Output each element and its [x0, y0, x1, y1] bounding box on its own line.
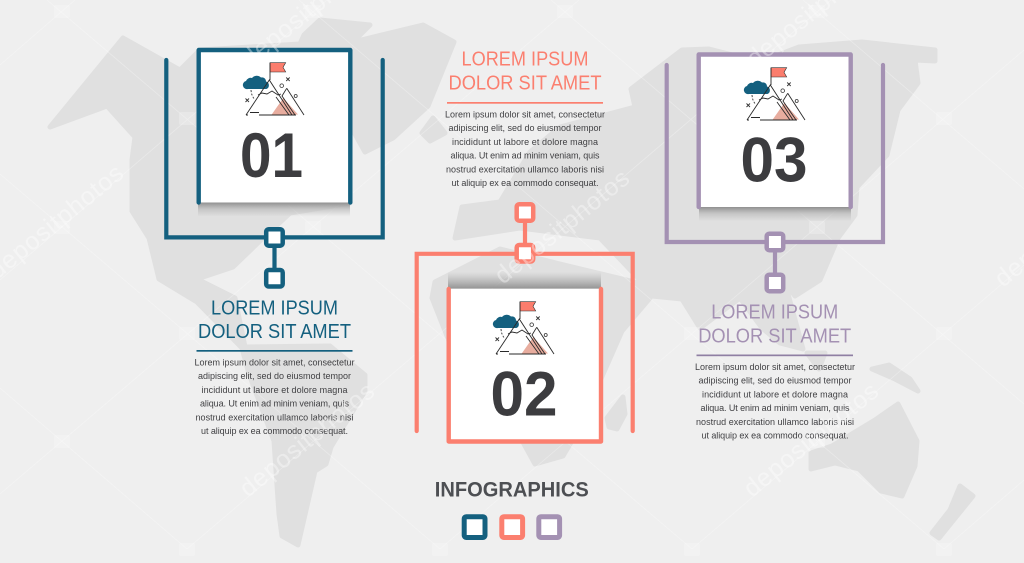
text block 01: [194, 358, 354, 436]
number 01: 01: [240, 121, 303, 191]
text block 02: incididunt ut labore et dolore magna: [452, 137, 598, 147]
panel 02: [417, 49, 633, 441]
title: INFOGRAPHICS: [435, 478, 589, 502]
heading 02: DOLOR SIT AMET: [448, 72, 602, 94]
bracket and connector 01: [166, 60, 383, 286]
bracket and connector 02: [417, 204, 633, 431]
text block 02: aliqua. Ut enim ad minim veniam, quis: [450, 150, 600, 160]
text block 01: ut aliquip ex ea commodo consequat.: [201, 426, 348, 436]
card 02: [449, 289, 601, 442]
card shadow 03: [699, 207, 851, 221]
watermark: depositphotos: [234, 377, 380, 503]
card 03: [699, 54, 851, 207]
icon: mountain flag 01: [243, 63, 304, 115]
heading rule 03: [696, 354, 853, 356]
icon: mountain flag 03: [744, 68, 805, 120]
heading 03: [698, 302, 851, 348]
number 03: 03: [740, 126, 808, 196]
text block 02: ut aliquip ex ea commodo consequat.: [452, 178, 598, 188]
card shadow 02: [448, 272, 601, 288]
text block 03: Lorem ipsum dolor sit amet, consectetur: [695, 362, 855, 372]
text block 02: nostrud exercitation ullamco laboris nisi: [446, 164, 604, 174]
watermark: depositphotos: [738, 377, 884, 503]
heading rule 02: [447, 102, 603, 104]
heading 02: LOREM IPSUM: [462, 49, 588, 71]
watermark: depositphotos: [489, 164, 635, 290]
heading 01: DOLOR SIT AMET: [198, 321, 351, 343]
text block 03: adipiscing elit, sed do eiusmod tempor: [698, 376, 852, 386]
text block 02: Lorem ipsum dolor sit amet, consectetur: [445, 110, 605, 120]
number 02: 02: [490, 360, 558, 430]
text block 01: incididunt ut labore et dolore magna: [202, 385, 348, 395]
heading rule 01: [196, 350, 352, 352]
heading 01: LOREM IPSUM: [211, 297, 338, 319]
text block 01: adipiscing elit, sed do eiusmod tempor: [198, 371, 351, 381]
icon: mountain flag 02: [493, 302, 554, 354]
text block 02: adipiscing elit, sed do eiusmod tempor: [448, 123, 602, 133]
text block 03: ut aliquip ex ea commodo consequat.: [702, 430, 848, 440]
text block 01: Lorem ipsum dolor sit amet, consectetur: [194, 358, 354, 368]
text block 01: aliqua. Ut enim ad minim veniam, quis: [200, 398, 350, 408]
text block 03: nostrud exercitation ullamco laboris nisi: [696, 417, 854, 427]
heading 02: [448, 49, 602, 94]
card shadow 01: [198, 202, 350, 216]
heading 03: LOREM IPSUM: [711, 302, 838, 324]
bracket and connector 03: [667, 65, 883, 291]
panel 03: [667, 54, 883, 440]
text block 03: [695, 362, 855, 440]
card 01: [199, 50, 350, 202]
text block 03: incididunt ut labore et dolore magna: [702, 389, 848, 399]
panel 01: [166, 50, 383, 436]
text block 03: aliqua. Ut enim ad minim veniam, quis: [700, 403, 850, 413]
text block 01: nostrud exercitation ullamco laboris nisi: [196, 412, 354, 422]
text block 02: [445, 110, 605, 188]
heading 01: [198, 297, 351, 343]
heading 03: DOLOR SIT AMET: [698, 326, 851, 348]
legend squares: [464, 517, 560, 538]
